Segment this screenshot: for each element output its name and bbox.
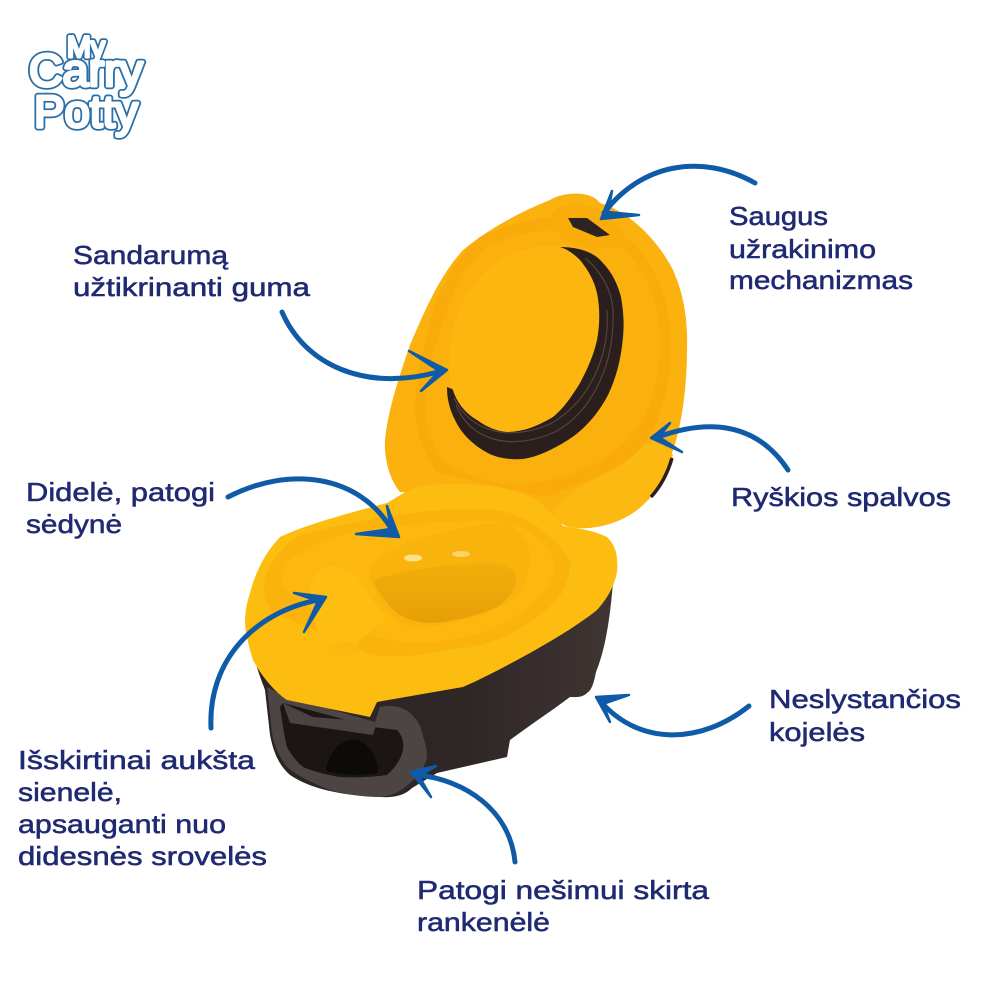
lid round plate	[449, 246, 599, 432]
lid groove	[415, 218, 671, 497]
text: seat label: sėdynė	[26, 509, 122, 539]
base body	[255, 582, 613, 797]
text: non-slip feet label: kojelės	[769, 717, 865, 747]
logo: My Carry Potty: My	[67, 31, 105, 64]
text: locking mechanism label: užrakinimo	[729, 234, 876, 264]
text: bright colours label: Ryškios spalvos	[731, 482, 951, 512]
arrow: high wall	[211, 593, 326, 728]
text: seat label: Didelė, patogi	[26, 477, 215, 507]
logo: My Carry Potty: Carry	[29, 45, 144, 96]
arrow: non-slip feet	[596, 695, 749, 735]
logo: My Carry Potty: Potty	[34, 86, 139, 137]
text: handle label: Patogi nešimui skirta	[417, 875, 710, 905]
logo: My Carry Potty: My	[67, 31, 105, 64]
seat basin	[264, 509, 570, 656]
potty product illustration	[245, 194, 687, 797]
text: locking mechanism label: Saugus	[729, 201, 828, 231]
logo: My Carry Potty	[29, 31, 144, 137]
logo: My Carry Potty: Carry	[29, 45, 144, 96]
lock tab	[550, 205, 623, 250]
text: locking mechanism label: mechanizmas	[729, 265, 913, 295]
lid	[385, 194, 687, 528]
carry handle	[267, 687, 427, 797]
rubber seal	[447, 247, 624, 459]
text: rubber seal label: užtikrinanti guma	[73, 272, 311, 302]
seat outer shell	[245, 484, 617, 717]
arrow: locking mechanism	[601, 166, 755, 219]
arrow: handle	[411, 766, 515, 862]
text: high wall label	[18, 745, 267, 871]
text: high wall label: didesnės srovelės	[18, 841, 267, 871]
text: non-slip feet label: Neslystančios	[769, 684, 961, 714]
arrow: seat	[228, 479, 399, 537]
text: non-slip feet label	[769, 684, 961, 747]
bowl water	[373, 563, 517, 623]
text: rubber seal label	[73, 240, 311, 302]
text: high wall label: sienelė,	[18, 777, 122, 807]
text: high wall label: apsauganti nuo	[18, 809, 226, 839]
text: handle label: rankenėlė	[417, 907, 550, 937]
text: handle label	[417, 875, 710, 937]
splash guard	[310, 566, 387, 654]
text: high wall label: Išskirtinai aukšta	[18, 745, 256, 775]
text: seat label	[26, 477, 215, 539]
logo: My Carry Potty: Potty	[34, 86, 139, 137]
text: rubber seal label: Sandarumą	[73, 240, 229, 270]
bowl opening	[370, 523, 530, 627]
text: locking mechanism label	[729, 201, 913, 295]
arrow: rubber seal	[282, 312, 447, 391]
arrow: bright colours	[651, 423, 788, 470]
seat top	[245, 484, 617, 717]
hinge flap	[553, 442, 673, 528]
